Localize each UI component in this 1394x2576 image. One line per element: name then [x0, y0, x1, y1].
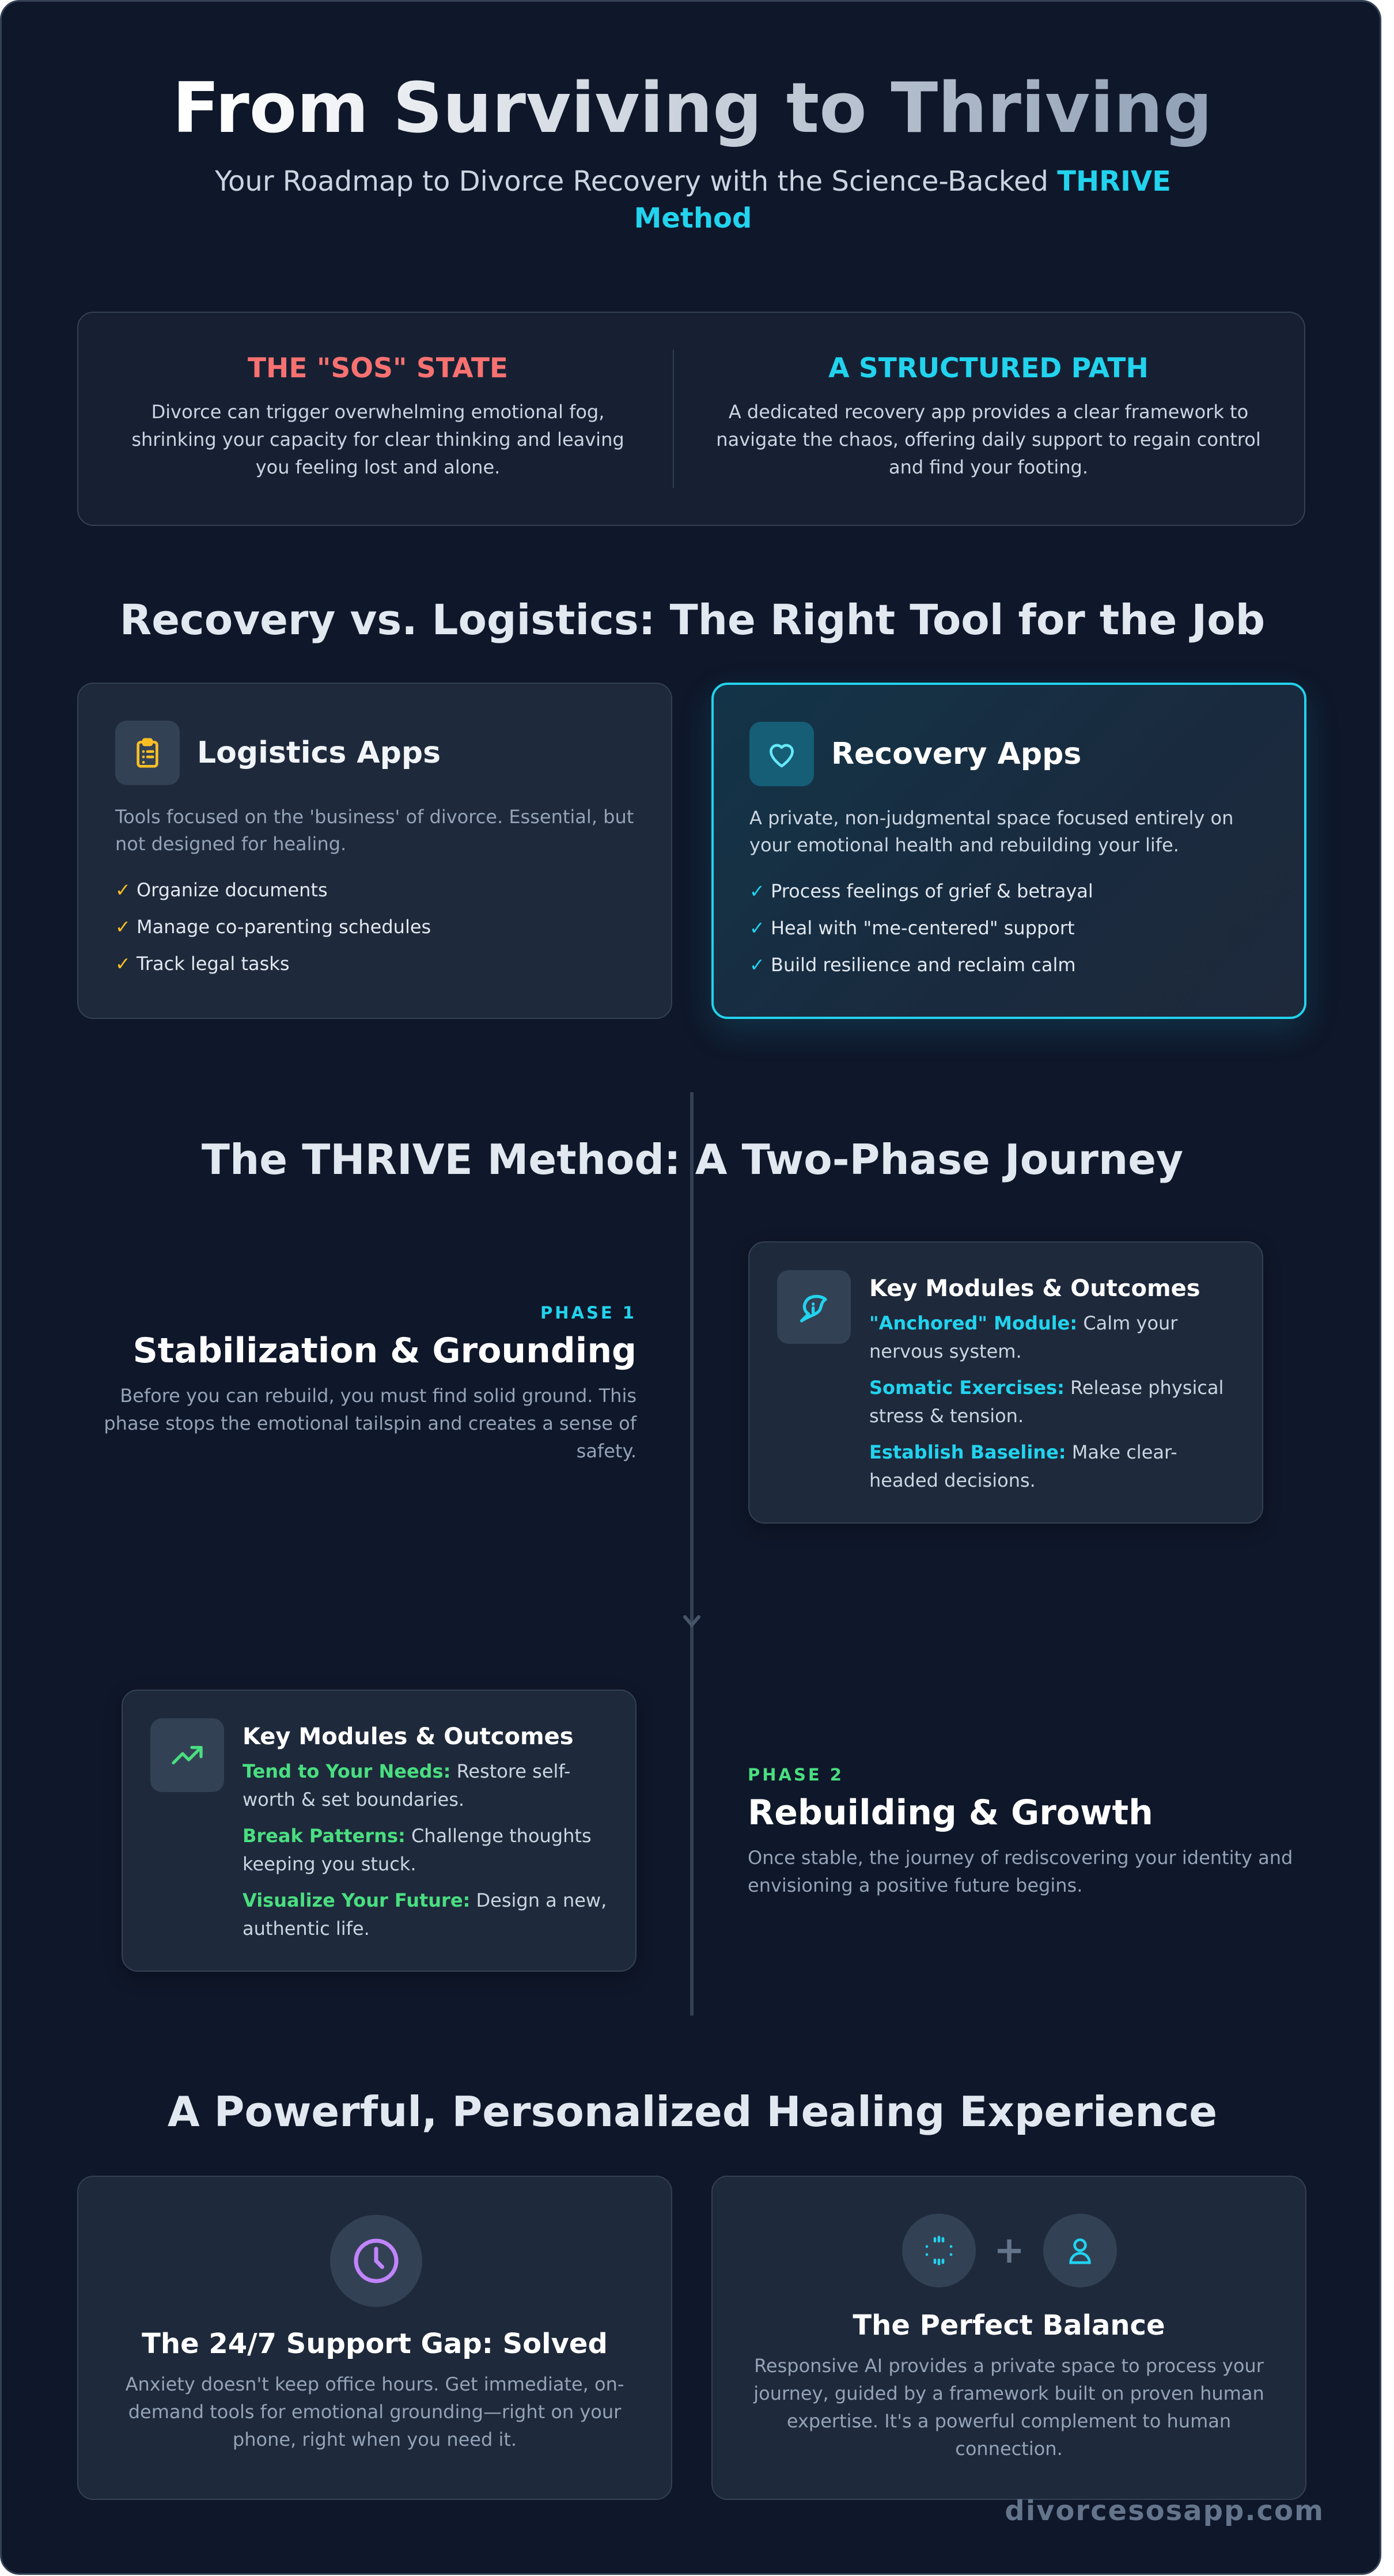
- modules list: Break Patterns: Challenge thoughts keeping you stuck.: [243, 1825, 592, 1875]
- body: Responsive AI provides a private space to process your journey, guided by a framework built on proven human expertise. It's a powerful complement to human connection.: [753, 2355, 1264, 2460]
- modules list: Visualize Your Future: Design a new, authentic life.: [243, 1889, 607, 1939]
- phase 2 card: [122, 1689, 637, 1972]
- plus sign: +: [994, 2229, 1025, 2272]
- footer url: divorcesosapp.com: [1005, 2495, 1324, 2527]
- modules list: Key Modules & Outcomes: [869, 1275, 1200, 1302]
- description: Tools focused on the 'business' of divorce. Essential, but not designed for healing.: [115, 806, 634, 855]
- checklist: ✓ Track legal tasks: [115, 953, 289, 975]
- subtitle: Your Roadmap to Divorce Recovery with the Science-Backed THRIVE Method: [215, 165, 1171, 234]
- checklist: ✓ Manage co-parenting schedules: [115, 916, 431, 938]
- phase 2 text: Once stable, the journey of rediscovering your identity and envisioning a positive future begins.: [748, 1847, 1293, 1896]
- phase 2 text: PHASE 2: [748, 1765, 844, 1785]
- icon: trending up: [150, 1718, 224, 1792]
- description: A private, non-judgmental space focused entirely on your emotional health and rebuilding your life.: [749, 807, 1233, 856]
- panel: intro: [77, 312, 1305, 526]
- checklist: ✓ Build resilience and reclaim calm: [749, 954, 1076, 976]
- phase 1 text: [104, 1303, 637, 1462]
- heading: Recovery Apps: [831, 737, 1081, 771]
- heading: recovery vs logistics: Recovery vs. Logistics: The Right Tool for the Job: [120, 596, 1265, 644]
- modules list: Somatic Exercises: Release physical stress & tension.: [869, 1377, 1223, 1427]
- modules list: Establish Baseline: Make clear-headed decisions.: [869, 1441, 1177, 1491]
- phase 2 text: [748, 1765, 1293, 1896]
- modules list: [243, 1723, 607, 1939]
- phase 1 text: Stabilization & Grounding: [133, 1331, 637, 1371]
- icon: heart: [749, 722, 814, 786]
- title: [2, 66, 1383, 152]
- modules list: Key Modules & Outcomes: [243, 1723, 574, 1750]
- panel: logistics apps: [77, 683, 672, 1019]
- SOS state: Divorce can trigger overwhelming emotional fog, shrinking your capacity for clear thinking and leaving you feeling lost and alone.: [131, 401, 624, 478]
- phase 1 text: Before you can rebuild, you must find solid ground. This phase stops the emotional tailspin and creates a sense of safety.: [104, 1385, 637, 1462]
- checklist: [115, 879, 431, 975]
- panel: recovery apps: [711, 683, 1306, 1019]
- checklist: ✓ Heal with "me-centered" support: [749, 917, 1075, 939]
- timeline line: [690, 1092, 694, 2016]
- icon: thought bubble: [777, 1270, 851, 1344]
- checklist: ✓ Process feelings of grief & betrayal: [749, 880, 1093, 902]
- arrow: timeline chevron: [683, 1615, 700, 1628]
- modules list: "Anchored" Module: Calm your nervous system.: [869, 1312, 1177, 1362]
- body: Anxiety doesn't keep office hours. Get immediate, on-demand tools for emotional grounding—right on your phone, right when you need it.: [126, 2373, 624, 2450]
- icon: clock: [330, 2215, 422, 2307]
- heading: thrive method: The THRIVE Method: A Two-Phase Journey: [202, 1135, 1183, 1184]
- phase 1 text: PHASE 1: [540, 1303, 637, 1323]
- structured path: A STRUCTURED PATH: [828, 353, 1149, 384]
- title: The 24/7 Support Gap: Solved: [142, 2328, 608, 2360]
- heading: healing experience: A Powerful, Personalized Healing Experience: [168, 2088, 1217, 2136]
- icon: clipboard: [115, 721, 180, 785]
- panel: perfect balance: [711, 2176, 1306, 2500]
- structured path: [716, 353, 1261, 478]
- checklist: [749, 880, 1093, 976]
- checklist: ✓ Organize documents: [115, 879, 328, 901]
- phase 1 card: [748, 1241, 1263, 1524]
- heading: Logistics Apps: [197, 736, 441, 770]
- SOS state: [131, 353, 624, 478]
- panel: 24/7 support: [77, 2176, 672, 2500]
- modules list: Tend to Your Needs: Restore self-worth & set boundaries.: [243, 1760, 570, 1810]
- modules list: [869, 1275, 1223, 1491]
- structured path: A dedicated recovery app provides a clear framework to navigate the chaos, offering daily support to regain control and find your footing.: [716, 401, 1261, 478]
- title: From Surviving to Thriving: [172, 69, 1213, 149]
- icon: AI sparkle: [902, 2214, 976, 2287]
- icon: person: [1043, 2214, 1117, 2287]
- phase 2 text: Rebuilding & Growth: [748, 1793, 1153, 1833]
- title: The Perfect Balance: [853, 2309, 1165, 2342]
- SOS state: THE "SOS" STATE: [248, 353, 508, 384]
